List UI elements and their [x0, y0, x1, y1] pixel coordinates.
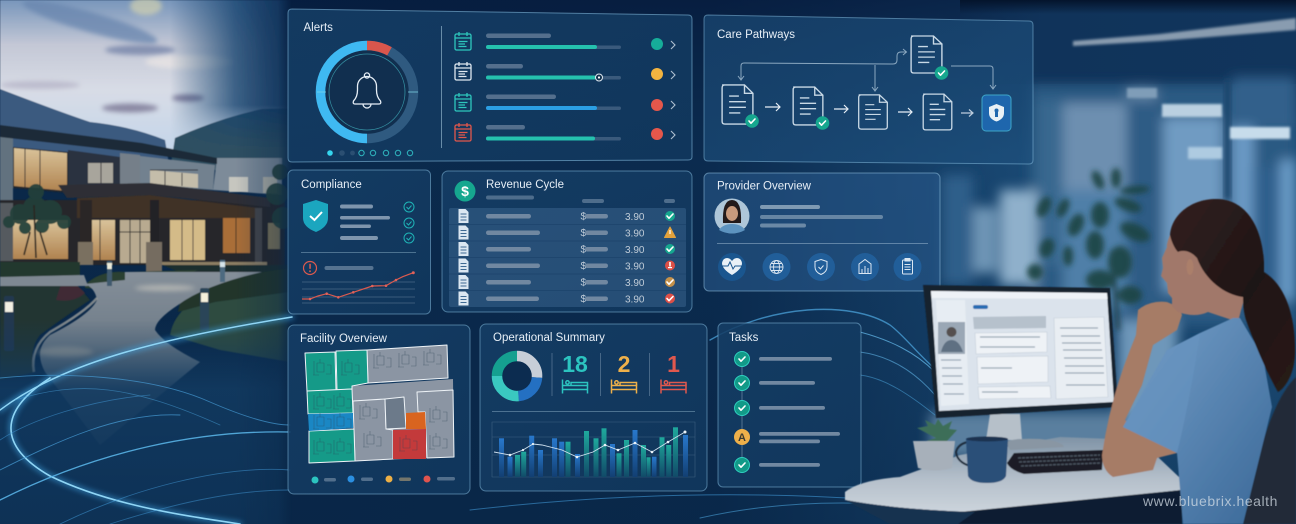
nurse: face and neck: [1161, 235, 1245, 322]
revenue row 3: [458, 242, 675, 256]
revenue row 2: $: [580, 228, 586, 239]
alert row 4: [455, 123, 675, 141]
revenue row 2: [458, 226, 676, 240]
icon: globe: [762, 253, 790, 281]
bar and line chart: [492, 422, 695, 477]
gray zones: [352, 345, 454, 461]
sky top-right fade: [173, 0, 290, 135]
panel: Alerts: [288, 9, 692, 162]
revenue row 5: $: [580, 278, 586, 288]
stat: 18 beds: 18: [562, 351, 588, 377]
revenue row 4: 3.90: [625, 262, 645, 272]
dark gray room: [385, 397, 406, 429]
revenue row 5: 3.90: [625, 278, 645, 289]
icon: bell: [353, 73, 381, 108]
provider text bars: [760, 205, 883, 228]
alerts ring gauge: [317, 46, 418, 138]
task 4 warning: [734, 429, 840, 445]
background: blurred office with ceiling and windows: [930, 0, 1296, 457]
heading: Revenue Cycle: Revenue Cycle: [486, 179, 564, 191]
nurse: scrub top: [1123, 318, 1272, 524]
ribbons: left glow: [0, 317, 292, 524]
path lights: [4, 260, 225, 351]
check badges: [745, 66, 948, 130]
compliance list bars: [340, 204, 390, 240]
provider avatar: [714, 198, 750, 234]
background: blurred plant: [1027, 168, 1153, 330]
building: [0, 125, 285, 272]
connector lines: [738, 49, 996, 91]
icon: shield check: [807, 253, 835, 281]
panel: Facility Overview: [288, 325, 470, 494]
driveway: [0, 271, 262, 408]
stat: 18 beds: [562, 351, 588, 394]
monitor: [923, 285, 1118, 418]
stat: 1 bed: [661, 351, 686, 394]
red room: [393, 429, 426, 459]
panel: Operational Summary: [480, 324, 707, 491]
teal rooms: [305, 350, 368, 463]
icon: warning circle: [304, 262, 316, 274]
panel: Revenue Cycle: [442, 171, 692, 312]
bottom blue tint: [0, 320, 300, 524]
keyboard: [1007, 450, 1103, 474]
heading: Facility Overview: Facility Overview: [300, 333, 388, 345]
revenue row 4: [458, 258, 675, 272]
revenue row 3: 3.90: [625, 245, 645, 256]
coffee mug: [956, 436, 1008, 483]
revenue row 2: 3.90: [625, 228, 645, 240]
icon: dollar coin: [454, 180, 476, 202]
revenue header bars: [486, 196, 675, 203]
panel: Compliance: [288, 170, 430, 314]
heading: Provider Overview: Provider Overview: [717, 180, 812, 192]
heading: Compliance: Compliance: [301, 179, 362, 191]
panel: Care Pathways: [704, 15, 1033, 164]
pagination dots: [327, 150, 413, 156]
website url: www.bluebrix.health: [1142, 493, 1278, 509]
left photo: resort building at dusk: [0, 0, 300, 524]
stat: 2 beds: [612, 351, 636, 394]
revenue row 6: 3.90: [625, 294, 645, 306]
task 1: [734, 352, 832, 366]
alert row 2: [455, 62, 675, 81]
floor plan legend: [312, 476, 455, 484]
heading: Care Pathways: Care Pathways: [717, 29, 795, 41]
alert row 3: [455, 93, 675, 111]
pathway arrows: [765, 103, 973, 116]
revenue row 3: $: [580, 244, 586, 256]
compliance trend chart: [302, 271, 415, 303]
alert row 1: [455, 32, 675, 50]
monitor stand: [986, 414, 1064, 450]
mountains: [0, 89, 300, 170]
stat: 2 beds: 2: [618, 351, 630, 377]
icon: shield tile: [982, 95, 1011, 131]
revenue row 1: $: [580, 212, 586, 222]
flowing light ribbons: [0, 309, 1090, 524]
plant and pot: [913, 419, 957, 470]
stat: 1 bed: 1: [667, 351, 680, 377]
heading: Tasks: Tasks: [729, 332, 759, 344]
ribbons: left lines: [0, 317, 292, 524]
revenue row 5: [458, 275, 675, 289]
nurse: ear: [1186, 259, 1194, 275]
floor plan: [305, 345, 454, 463]
ribbons: near monitor: [470, 309, 1090, 520]
landscaping and trees: [0, 164, 294, 380]
nurse: arm and hand: [1102, 302, 1182, 477]
heading: Operational Summary: Operational Summary: [493, 332, 605, 344]
icon: shield: [303, 200, 328, 232]
icon: clipboard: [894, 253, 922, 281]
heading: Alerts: Alerts: [304, 22, 333, 34]
compliance checks: [404, 202, 414, 243]
pathway step documents: [722, 36, 952, 130]
task 5: [734, 458, 820, 472]
panel: Provider Overview: [704, 173, 940, 291]
task 3: [734, 400, 825, 416]
panel: Tasks: [718, 323, 861, 487]
nurse: hair and ponytail: [1170, 199, 1295, 392]
revenue row 1: [458, 209, 675, 223]
revenue row 6: $: [580, 294, 586, 305]
orange room: [406, 412, 426, 429]
icon: dollar coin: $: [461, 183, 469, 199]
desk scene: [845, 199, 1296, 524]
desk: [845, 437, 1182, 524]
revenue row 4: $: [580, 261, 586, 272]
task 4 warning: A: [738, 432, 746, 444]
revenue table: [449, 208, 686, 307]
sky and clouds: [0, 0, 300, 150]
chair: [1243, 377, 1296, 524]
revenue row 6: [458, 292, 675, 306]
furniture marks: [313, 349, 447, 454]
task 2: [734, 376, 815, 390]
donut chart: [497, 356, 537, 396]
revenue row 1: 3.90: [625, 212, 645, 223]
blue room: [308, 413, 353, 431]
icon: analytics: [851, 253, 879, 281]
icon: heart pulse: [718, 253, 746, 281]
